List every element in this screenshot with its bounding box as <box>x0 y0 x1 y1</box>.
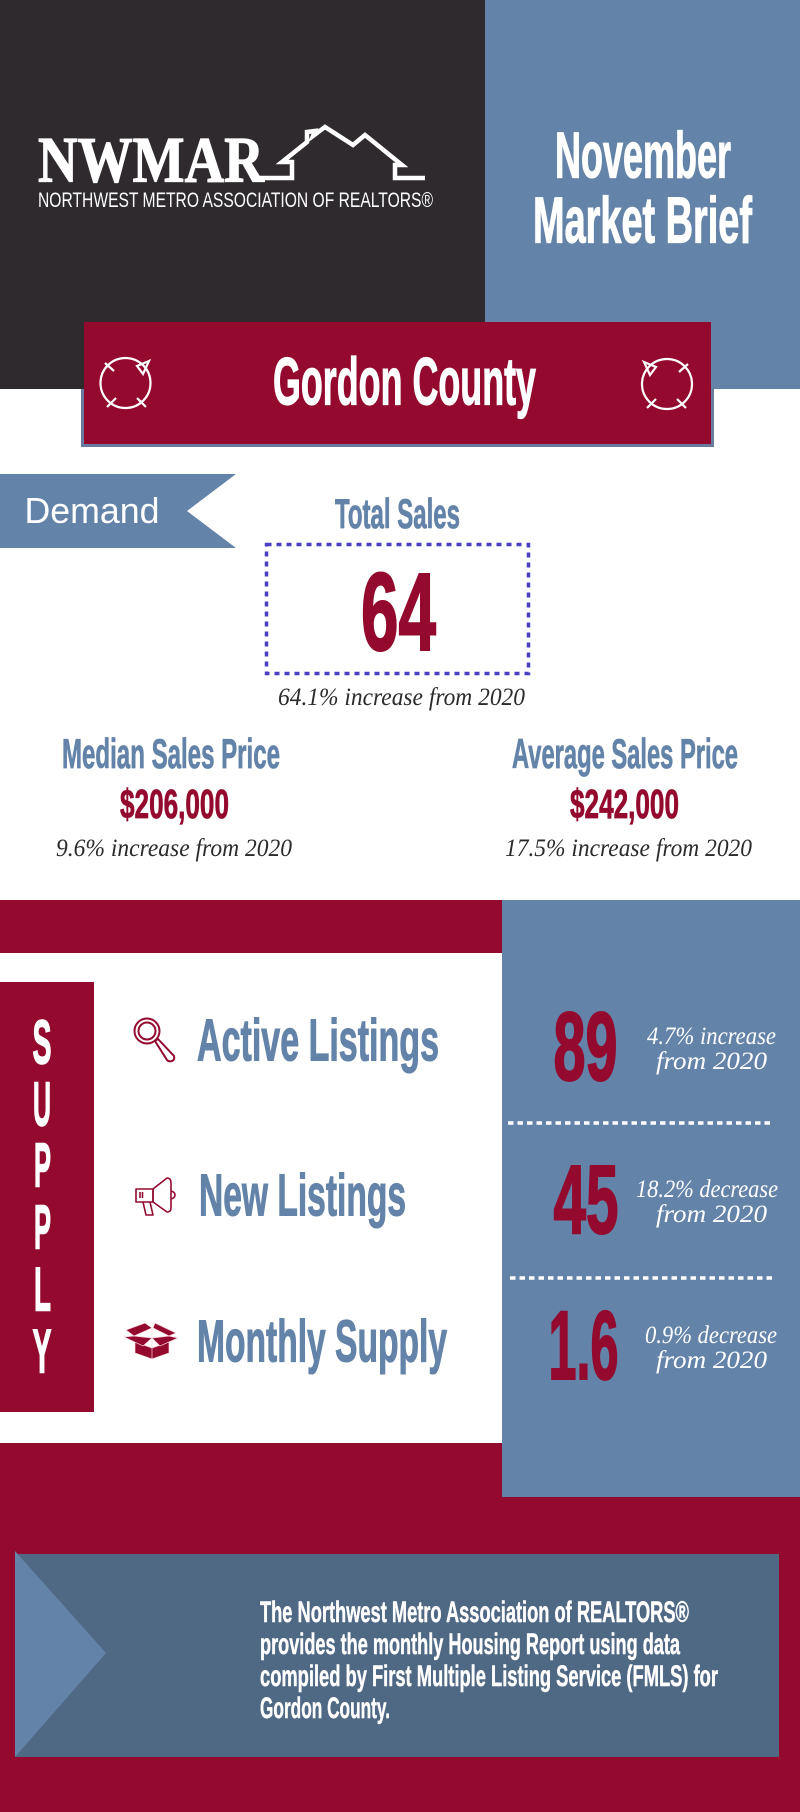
row: new listings <box>136 1162 406 1228</box>
logo: house outline <box>258 127 425 178</box>
value: 89: 89 <box>554 992 618 1101</box>
change note: 9.6% increase from 2020 <box>56 835 292 862</box>
note: monthly supply change <box>645 1322 777 1374</box>
value: 64: 64 <box>361 551 436 674</box>
source text: Gordon County. <box>260 1692 390 1725</box>
icon: megaphone <box>136 1178 175 1215</box>
label: SUPPLY <box>32 1008 52 1386</box>
supply sidebar: U <box>33 1070 51 1140</box>
supply sidebar <box>0 982 94 1412</box>
supply sidebar: P <box>34 1194 51 1262</box>
dashed box <box>266 544 528 674</box>
demand ribbon <box>0 474 236 548</box>
label: New Listings: New Listings <box>199 1162 406 1228</box>
icon: open box <box>124 1323 178 1359</box>
stat: average sales price <box>505 730 752 862</box>
value: $242,000: $242,000 <box>570 781 679 827</box>
heading: Median Sales Price: Median Sales Price <box>62 730 280 777</box>
note: monthly supply change: from 2020 <box>656 1347 768 1374</box>
supply sidebar: P <box>34 1132 51 1200</box>
arrow <box>15 1551 106 1757</box>
stat: total sales <box>266 490 528 711</box>
label: Monthly Supply: Monthly Supply <box>197 1308 447 1374</box>
logo: association name: NORTHWEST METRO ASSOCIATION OF REALTORS® <box>38 189 433 212</box>
heading: Gordon County: Gordon County <box>273 344 536 420</box>
label: Demand: Demand <box>24 490 160 531</box>
header panel: title <box>485 0 800 389</box>
value: $206,000: $206,000 <box>120 781 229 827</box>
note: new listings change: 18.2% decrease <box>636 1176 778 1203</box>
supply sidebar: S <box>32 1008 52 1078</box>
footer background <box>0 1443 800 1812</box>
icon: compass right <box>642 359 692 409</box>
title: November Market Brief <box>533 118 752 256</box>
change note: 17.5% increase from 2020 <box>505 835 752 862</box>
supply sidebar: L <box>34 1256 51 1324</box>
supply values panel <box>502 900 800 1497</box>
note: new listings change <box>636 1176 778 1228</box>
heading: Total Sales: Total Sales <box>335 490 460 537</box>
source text <box>260 1596 718 1725</box>
supply sidebar: Y <box>32 1318 52 1386</box>
logo: NWMAR <box>38 124 433 212</box>
logo: NWMAR: NWMAR <box>38 124 265 196</box>
value: 1.6: 1.6 <box>548 1291 618 1400</box>
change note: 64.1% increase from 2020 <box>278 684 525 711</box>
header panel: logo <box>0 0 485 389</box>
note: active listings change <box>647 1023 776 1075</box>
label: Active Listings: Active Listings <box>197 1008 439 1074</box>
supply top band <box>0 900 502 953</box>
footer panel <box>15 1551 779 1757</box>
stat: median sales price <box>56 730 292 862</box>
icon: magnifying glass <box>134 1018 174 1061</box>
row: monthly supply <box>124 1308 447 1374</box>
row: active listings <box>134 1008 439 1074</box>
icon: compass left <box>100 358 150 408</box>
note: monthly supply change: 0.9% decrease <box>645 1322 777 1349</box>
county banner <box>81 322 714 447</box>
note: active listings change: from 2020 <box>656 1048 768 1075</box>
note: active listings change: 4.7% increase <box>647 1023 776 1050</box>
value: 45: 45 <box>554 1145 618 1254</box>
note: new listings change: from 2020 <box>656 1201 768 1228</box>
